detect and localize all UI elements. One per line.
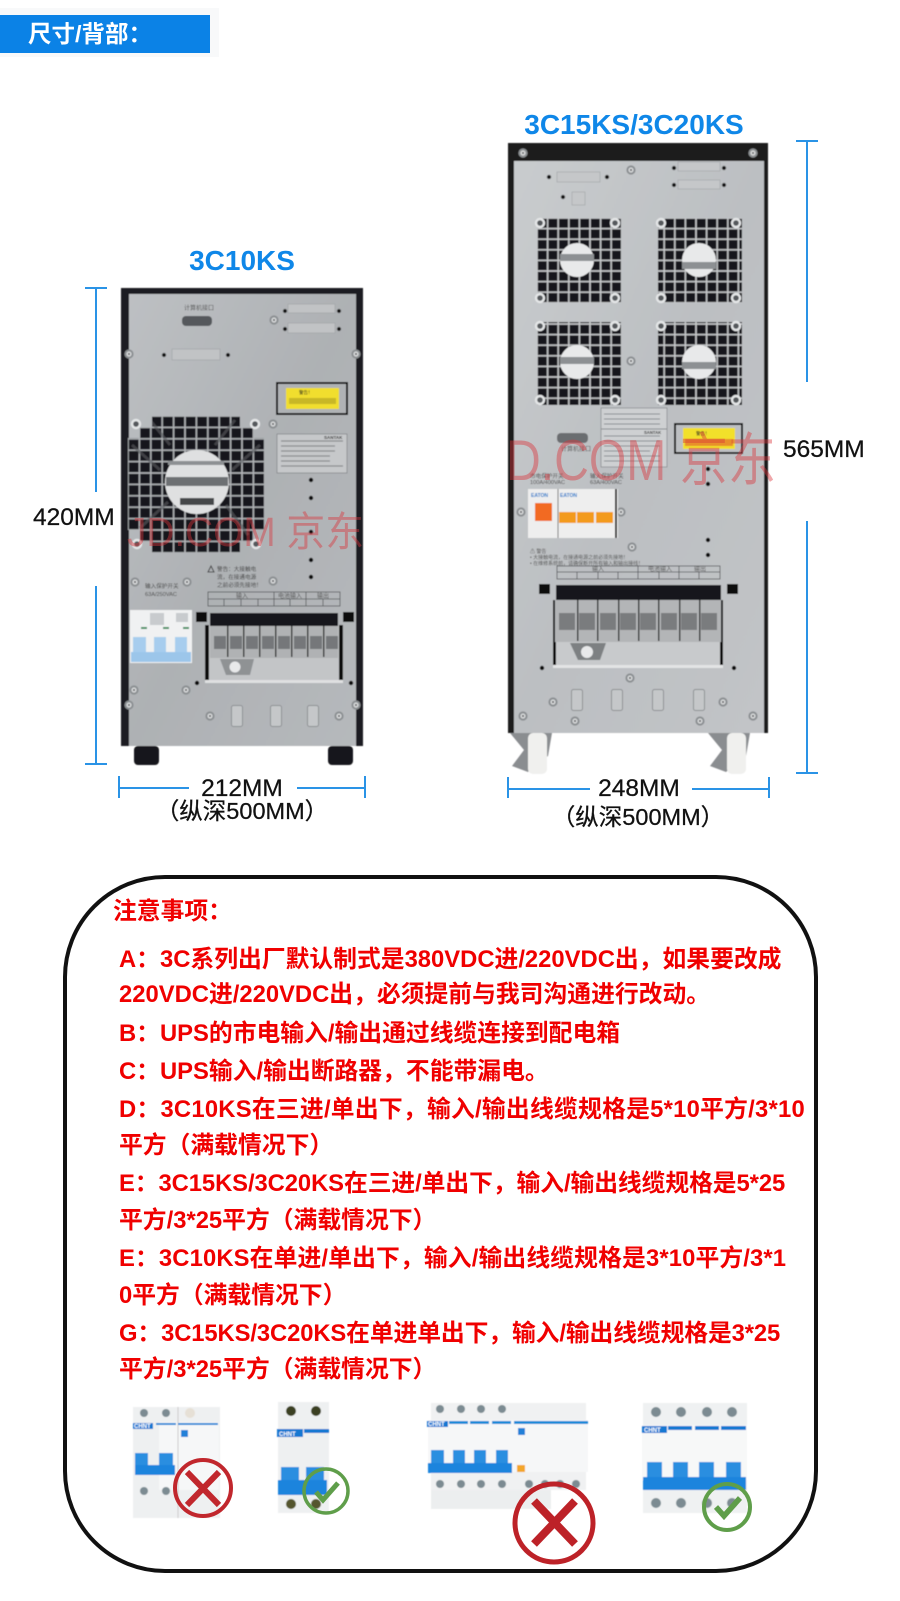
note A: 220VDC进/220VDC出，必须提前与我司沟通进行改动。 [119, 981, 710, 1008]
computer interface port: 计算机接口 [561, 445, 591, 453]
breaker photo: 4-pole with leakage (wrong): CHNT [428, 1422, 445, 1428]
breaker labels [530, 472, 624, 486]
icon: red cross mark [175, 1460, 231, 1516]
terminal labels table [557, 565, 720, 579]
model title: 3C10KS: 3C10KS [189, 245, 295, 276]
terminal block [539, 584, 738, 668]
dimension line: 565MM height [783, 141, 865, 773]
cabinet screws [516, 148, 758, 726]
input breaker label: 输入保护开关 [145, 582, 179, 590]
watermark: D.COM 京东 right: D.COM 京东 [506, 429, 776, 493]
fan grille 3 [535, 321, 621, 405]
icon: large red cross mark [515, 1484, 593, 1562]
terminal labels table [208, 592, 340, 606]
note E: 平方/3*25平方（满载情况下） [119, 1206, 436, 1234]
icon: green check mark large [704, 1484, 750, 1530]
dimension line: 248MM width: （纵深500MM） [552, 804, 724, 830]
note B: B：UPS的市电输入/输出通过线缆连接到配电箱 [119, 1020, 620, 1047]
terminal labels table: 输入 [236, 592, 248, 600]
feet [134, 746, 353, 765]
breaker photo: 4-pole (correct) [642, 1403, 747, 1513]
blank plates [547, 162, 726, 205]
note C: C：UPS输入/输出断路器，不能带漏电。 [119, 1058, 549, 1085]
warning label [675, 424, 742, 453]
3-pole input breaker [130, 610, 192, 663]
dimension line: 212MM width: （纵深500MM） [156, 798, 328, 824]
fan grille 1 [535, 218, 621, 303]
heading bar: 尺寸/背部: 尺寸/背部： [28, 15, 152, 49]
input breaker label: 63A/250VAC [145, 592, 177, 598]
warning notice [208, 565, 262, 589]
warning label: 警告！ [299, 389, 312, 396]
note E second: 0平方（满载情况下） [119, 1281, 346, 1309]
warning notice: 之前必须先接地！ [217, 581, 262, 589]
computer interface port [182, 304, 214, 326]
4-pole Eaton breaker: EATON [560, 493, 577, 499]
terminal labels table: 电池输入 [648, 565, 672, 573]
warning notice: 警告：大接触电 [217, 565, 257, 573]
product photo: 3C15KS/3C20KS rear [508, 143, 768, 774]
warning notice: 流，在接通电源 [217, 573, 257, 581]
breaker photo: 2-pole (correct): CHNT [279, 1432, 296, 1438]
casters [510, 733, 750, 774]
breaker labels: 市电保护开关 [530, 472, 564, 480]
breaker labels: 100A/400VAC [530, 480, 565, 486]
note G: 平方/3*25平方（满载情况下） [119, 1355, 436, 1383]
4-pole Eaton breaker: EATON [531, 493, 548, 499]
warning notice: • 大接触电流，在接通电源之前必须先接地！ [530, 554, 628, 561]
fan grille 2 [656, 218, 742, 303]
breaker photo: 2-pole (correct) [277, 1402, 329, 1513]
computer interface port: 计算机接口 [184, 304, 214, 312]
fan grille 4 [656, 321, 742, 405]
note G: G：3C15KS/3C20KS在单进单出下，输入/输出线缆规格是3*25 [119, 1320, 780, 1347]
bottom latches [572, 690, 704, 710]
dimension line: 248MM width [508, 775, 769, 830]
dimension line: 248MM width: 248MM [598, 775, 680, 802]
computer interface port [557, 433, 591, 453]
blank plates [162, 304, 341, 360]
breaker labels: 63A/400VAC [590, 480, 622, 486]
warning notice [530, 548, 643, 567]
dimension line: 565MM height: 565MM [783, 436, 865, 463]
rating plate [277, 434, 347, 473]
warning notice: • 在维修系统前，请确保断开所有输入和输出接线！ [530, 560, 643, 567]
breaker photo: 4-pole with leakage (wrong) [427, 1403, 588, 1509]
icon: green check mark [304, 1469, 348, 1513]
note D: D：3C10KS在三进/单出下，输入/输出线缆规格是5*10平方/3*10 [119, 1095, 805, 1123]
terminal labels table: 输出 [317, 592, 329, 600]
panel: notes [65, 877, 816, 1571]
warning label: 警告！ [696, 430, 710, 437]
warning notice: ⚠ 警告 [530, 548, 546, 555]
input breaker label [145, 582, 179, 598]
terminal labels table: 电池输入 [278, 592, 302, 600]
notes heading: 注意事项： [113, 897, 232, 925]
breaker photo: 2-pole with leakage (wrong) [133, 1407, 220, 1518]
cabinet screws [124, 315, 361, 721]
rating plate: SANTAK [644, 430, 661, 435]
terminal block [196, 612, 354, 683]
rating plate: SANTAK [324, 435, 343, 440]
cabinet body [508, 143, 768, 733]
4-pole Eaton breaker [528, 489, 618, 538]
warning label [277, 383, 347, 414]
rating plate [601, 408, 667, 467]
note A: A：3C系列出厂默认制式是380VDC进/220VDC出，如果要改成 [119, 946, 782, 973]
terminal labels table: 输出 [694, 565, 706, 573]
breaker photo: 4-pole (correct): CHNT [644, 1428, 661, 1434]
dimension line: 212MM width [119, 775, 365, 824]
cabinet body [121, 288, 363, 746]
watermark: JD.COM 京东 left: JD.COM 京东 [127, 510, 364, 556]
terminal labels table: 输入 [592, 565, 604, 573]
bottom latches [232, 706, 318, 726]
note E: E：3C15KS/3C20KS在三进/单出下，输入/输出线缆规格是5*25 [119, 1170, 785, 1197]
model title: 3C15KS/3C20KS: 3C15KS/3C20KS [524, 109, 744, 140]
heading bar: 尺寸/背部 [0, 8, 219, 57]
note D: 平方（满载情况下） [119, 1131, 333, 1159]
breaker labels: 输入保护开关 [590, 472, 624, 480]
note E second: E：3C10KS在单进/单出下，输入/输出线缆规格是3*10平方/3*1 [119, 1244, 786, 1272]
dimension line: 212MM width: 212MM [201, 775, 283, 802]
dimension line: 420MM height [33, 288, 115, 764]
product photo: 3C10KS rear [121, 288, 363, 765]
breaker photo: 2-pole with leakage (wrong): CHNT [134, 1424, 151, 1430]
fan grille [128, 416, 265, 554]
dimension line: 420MM height: 420MM [33, 504, 115, 531]
